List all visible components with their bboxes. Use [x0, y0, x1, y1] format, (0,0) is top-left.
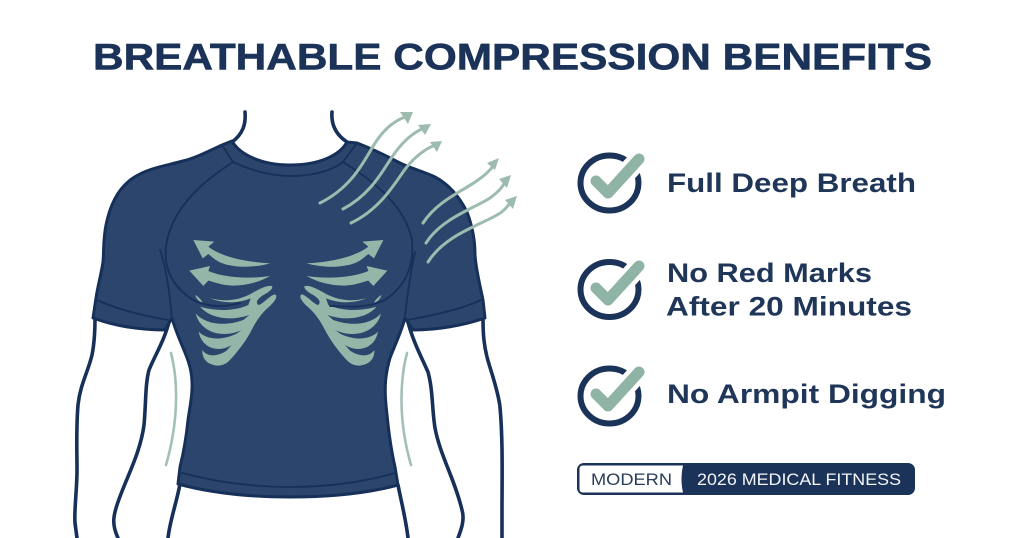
- label: After 20 Minutes: [666, 292, 912, 322]
- shirt seams: [97, 143, 481, 487]
- badge: 2026 MEDICAL FITNESS: [697, 471, 901, 489]
- icon: check circle: [580, 156, 639, 210]
- icon: check circle: [580, 262, 639, 317]
- title: BREATHABLE COMPRESSION BENEFITS: [93, 36, 932, 78]
- arms and lower torso outline: [75, 318, 502, 538]
- label: No Armpit Digging: [667, 379, 946, 409]
- neck: [232, 112, 347, 142]
- illustration: torso wearing compression shirt: [75, 112, 502, 538]
- shirt body: [93, 141, 485, 497]
- side contour lines: [166, 353, 411, 465]
- icon: check circle: [580, 368, 639, 424]
- badge: [577, 463, 915, 495]
- airflow arrows: shoulder: [320, 112, 517, 262]
- benefit: full deep breath: [580, 156, 916, 210]
- rib cage and breathing arrows: [189, 240, 387, 366]
- label: Full Deep Breath: [667, 168, 916, 198]
- badge: MODERN: [591, 471, 672, 489]
- label: No Red Marks: [667, 258, 872, 288]
- benefit: no red marks: [580, 258, 912, 322]
- benefit: no armpit digging: [580, 368, 946, 424]
